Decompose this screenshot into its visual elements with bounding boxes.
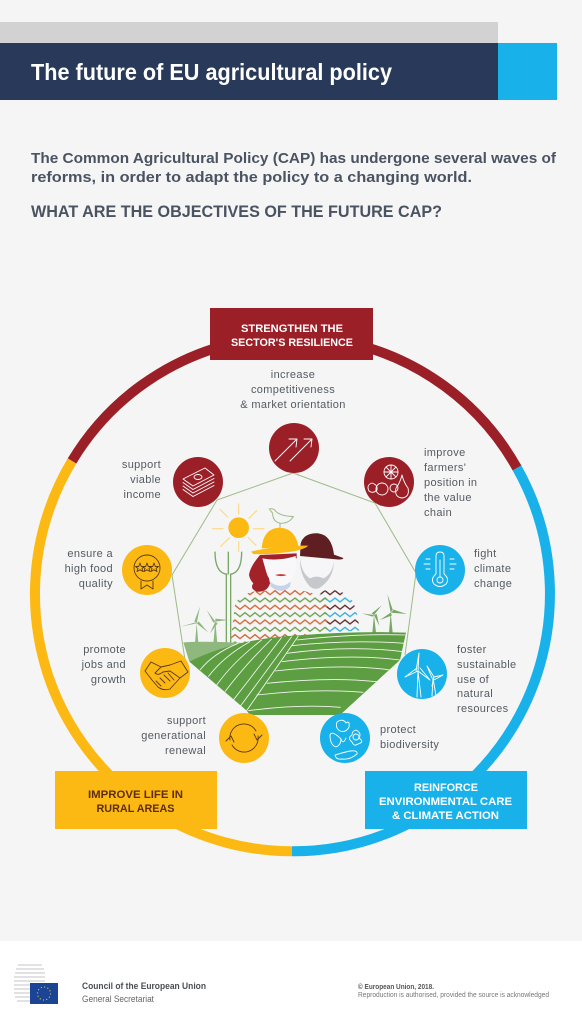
objective: viable income (173, 457, 223, 507)
copyright (358, 983, 549, 999)
icon: fruits (368, 465, 408, 498)
icon: bird (269, 509, 293, 528)
label: natural resources: use of (457, 674, 490, 686)
woman (249, 528, 308, 592)
label: increase competitiveness (240, 369, 346, 411)
objective: climate change (415, 545, 465, 595)
icon: cycle arrows (226, 724, 262, 752)
icon: wind turbines (405, 653, 443, 697)
intro paragraph (31, 150, 557, 186)
label: viable income: income (123, 489, 161, 501)
label: increase competitiveness: competitiveness (251, 384, 335, 396)
label: generational renewal: renewal (165, 745, 206, 757)
label: food quality: ensure a (67, 548, 114, 560)
label: natural resources: natural (457, 688, 493, 700)
intro paragraph: The Common Agricultural Policy (CAP) has undergone several waves of (31, 150, 557, 167)
label: farmers' position: chain (424, 507, 452, 519)
label: natural resources: foster (457, 644, 487, 656)
label: fight climate change: climate (474, 563, 511, 575)
box: strengthen resilience: SECTOR'S RESILIENCE (231, 337, 353, 349)
icon: right wind turbines (362, 594, 407, 633)
label: protect biodiversity: protect (380, 724, 416, 736)
box: strengthen resilience (210, 308, 373, 360)
label: natural resources (457, 644, 516, 715)
intro paragraph: reforms, in order to adapt the policy to a changing world. (31, 169, 472, 186)
logo: Council of the EU (14, 965, 58, 1004)
label: generational renewal: generational (141, 730, 206, 742)
header banner (0, 22, 557, 100)
label: protect biodiversity: biodiversity (380, 739, 439, 751)
footer (0, 941, 582, 1024)
label: farmers' position: improve (424, 447, 466, 459)
icon: arrows (275, 439, 312, 461)
icon: left wind turbines (181, 607, 228, 643)
icon: butterfly, flower, hand (330, 720, 362, 759)
label: farmers' position: position in (424, 477, 477, 489)
label: fight climate change (474, 548, 512, 590)
ring: three objectives (35, 336, 550, 851)
box: environment and climate: REINFORCE (414, 782, 478, 794)
central illustration: farmers and fields (181, 504, 407, 715)
man (300, 533, 343, 589)
label: jobs and growth (81, 644, 126, 686)
icon: handshake (145, 661, 188, 690)
label: generational renewal (141, 715, 206, 757)
box: improve rural life (55, 771, 217, 829)
council name: Council of the European Union (82, 981, 206, 991)
copyright: © European Union, 2018. (358, 983, 434, 991)
icon: pitchfork (215, 552, 242, 645)
council name: General Secretariat (82, 994, 154, 1004)
icon: thermometer (424, 552, 456, 586)
label: farmers' position: the value (424, 492, 472, 504)
copyright: Reproduction is authorised, provided the source is acknowledged (358, 992, 549, 999)
objective: biodiversity (320, 713, 370, 763)
title: The future of EU agricultural policy (31, 59, 392, 85)
icon: banknotes (183, 468, 214, 496)
label: increase competitiveness: increase (271, 369, 315, 381)
label: protect biodiversity (380, 724, 439, 751)
label: natural resources: resources (457, 703, 509, 715)
label: jobs and growth: promote (83, 644, 126, 656)
box: environment and climate (365, 771, 527, 829)
label: jobs and growth: growth (91, 674, 126, 686)
label: farmers' position: farmers' (424, 462, 466, 474)
objective: food quality (122, 545, 172, 595)
heptagon outline (172, 473, 416, 660)
objective: jobs and growth (140, 648, 190, 698)
council name (82, 981, 206, 1004)
box: environment and climate: & CLIMATE ACTION (392, 810, 499, 822)
label: fight climate change: fight (474, 548, 497, 560)
box: strengthen resilience: STRENGTHEN THE (241, 323, 343, 335)
icon: rosette (134, 555, 160, 589)
green fields (189, 632, 406, 715)
label: food quality: high food (65, 563, 113, 575)
label: viable income (122, 459, 161, 501)
label: fight climate change: change (474, 578, 512, 590)
box: environment and climate: ENVIRONMENTAL CARE (379, 796, 512, 808)
box: improve rural life: IMPROVE LIFE IN (88, 789, 183, 801)
woman's shirt (231, 588, 327, 646)
label: natural resources: sustainable (457, 659, 516, 671)
objective: increase competitiveness (269, 423, 319, 473)
label: food quality (65, 548, 114, 590)
icon: sun (212, 504, 264, 552)
section heading: WHAT ARE THE OBJECTIVES OF THE FUTURE CAP? (31, 202, 442, 221)
label: viable income: viable (130, 474, 161, 486)
man's shirt (320, 590, 359, 633)
objective: generational renewal (219, 713, 269, 763)
light green hill (183, 642, 250, 662)
label: jobs and growth: jobs and (81, 659, 126, 671)
label: food quality: quality (79, 578, 113, 590)
label: farmers' position (424, 447, 477, 519)
label: generational renewal: support (167, 715, 206, 727)
objective: farmers' position (364, 457, 414, 507)
objective: natural resources (397, 649, 447, 699)
label: increase competitiveness: & market orientation (240, 399, 346, 411)
box: improve rural life: RURAL AREAS (96, 803, 174, 815)
label: viable income: support (122, 459, 161, 471)
